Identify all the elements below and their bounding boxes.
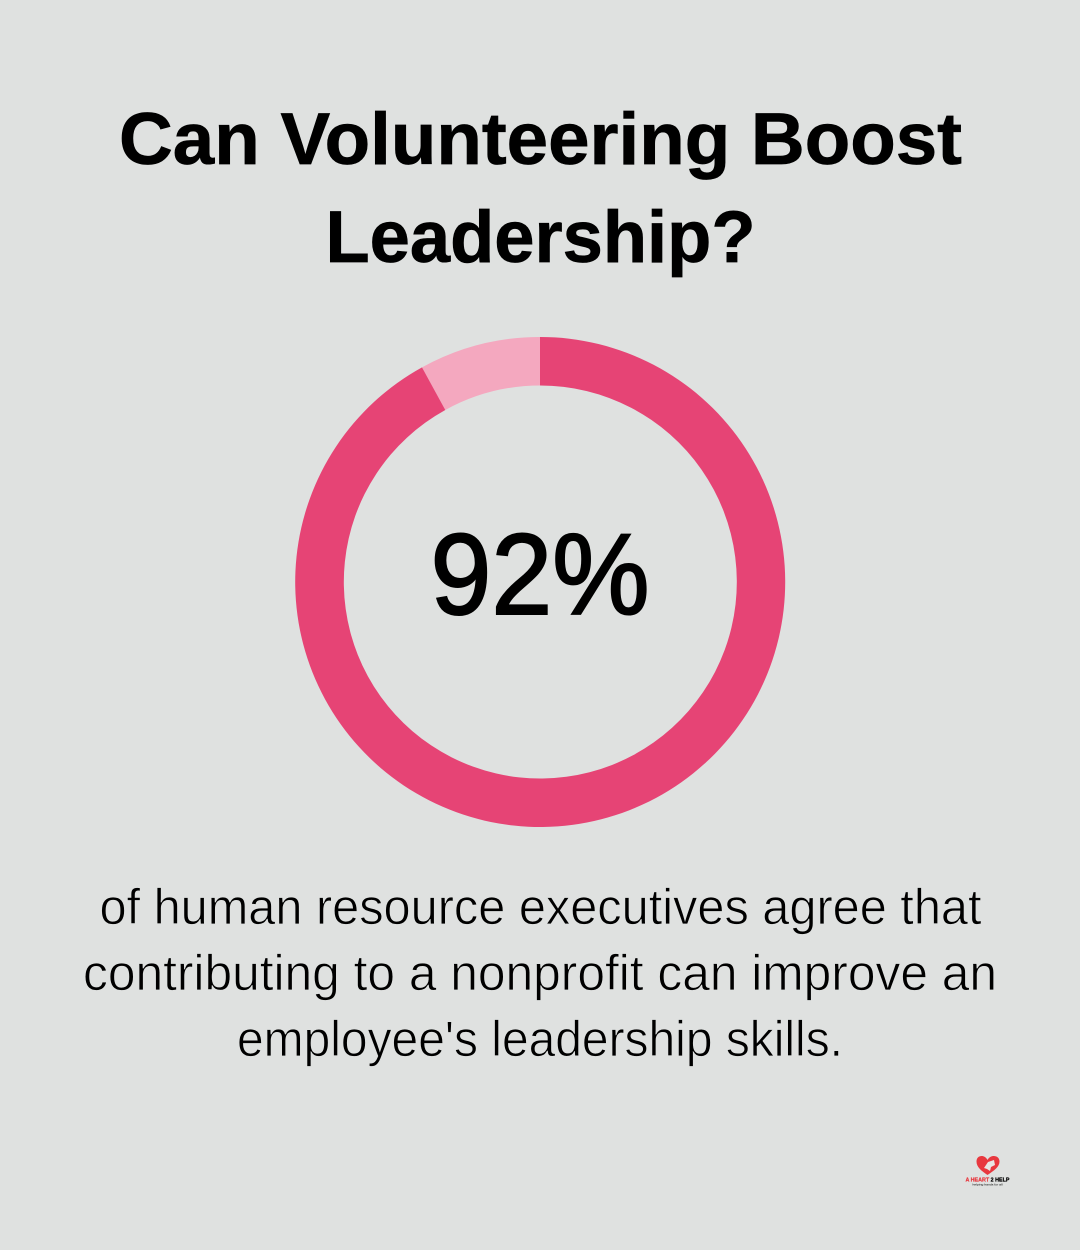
description text <box>83 879 997 1067</box>
logo tagline: helping hands for all <box>972 1182 1003 1186</box>
percentage value: 92% <box>430 511 650 639</box>
title: Leadership? <box>326 197 756 278</box>
description text: contributing to a nonprofit can improve an <box>83 945 997 1001</box>
description text: of human resource executives agree that <box>100 879 982 935</box>
logo: A Heart 2 Help <box>966 1156 1010 1186</box>
logo wordmark: A HEART 2 HELP <box>966 1178 1010 1184</box>
title: Can Volunteering Boost <box>119 99 962 180</box>
description text: employee's leadership skills. <box>237 1011 843 1067</box>
donut segment: 92% <box>295 337 785 827</box>
title <box>119 99 962 278</box>
icon: hands <box>984 1160 995 1171</box>
donut chart: 92% <box>295 337 785 827</box>
donut segment: remaining 8% <box>422 337 540 410</box>
icon: heart <box>976 1156 1000 1175</box>
